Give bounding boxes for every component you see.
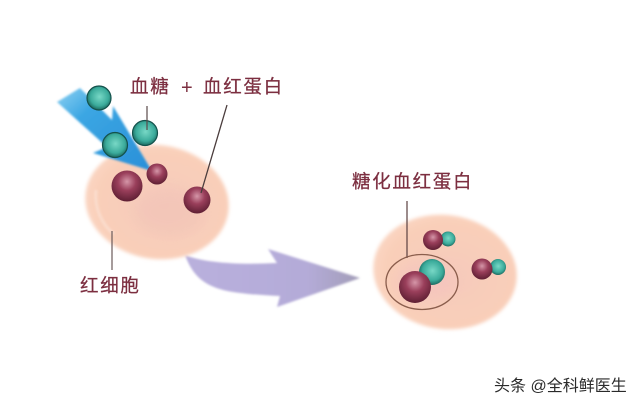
leader line: glycated hemoglobin bbox=[406, 201, 408, 258]
glycated molecule pair: right bbox=[472, 258, 506, 280]
leader line: hemoglobin bbox=[201, 105, 227, 193]
label: glucose + hemoglobin: + bbox=[181, 77, 193, 99]
label: red blood cell: 红细胞 bbox=[80, 275, 141, 296]
ring around glycated hemoglobin bbox=[386, 254, 458, 310]
watermark: 头条 @全科鲜医生 bbox=[494, 377, 627, 395]
leader line: glucose bbox=[146, 106, 148, 130]
label: glycated hemoglobin: 糖化血红蛋白 bbox=[352, 171, 473, 192]
glycated molecule pair: large circled bbox=[399, 259, 445, 303]
blue arrow bbox=[57, 88, 152, 171]
leader line: red blood cell bbox=[111, 231, 113, 270]
label: glucose + hemoglobin: 血糖 bbox=[130, 76, 170, 97]
purple arrow bbox=[185, 249, 360, 307]
red blood cell: right bbox=[366, 206, 524, 338]
label: glucose + hemoglobin: 血红蛋白 bbox=[203, 76, 284, 97]
hemoglobin molecules bbox=[112, 164, 210, 214]
red blood cell: left bbox=[78, 136, 236, 268]
label: glucose + hemoglobin bbox=[130, 76, 284, 99]
glycated molecule pair: small top bbox=[423, 230, 456, 250]
glucose molecules bbox=[87, 86, 158, 158]
